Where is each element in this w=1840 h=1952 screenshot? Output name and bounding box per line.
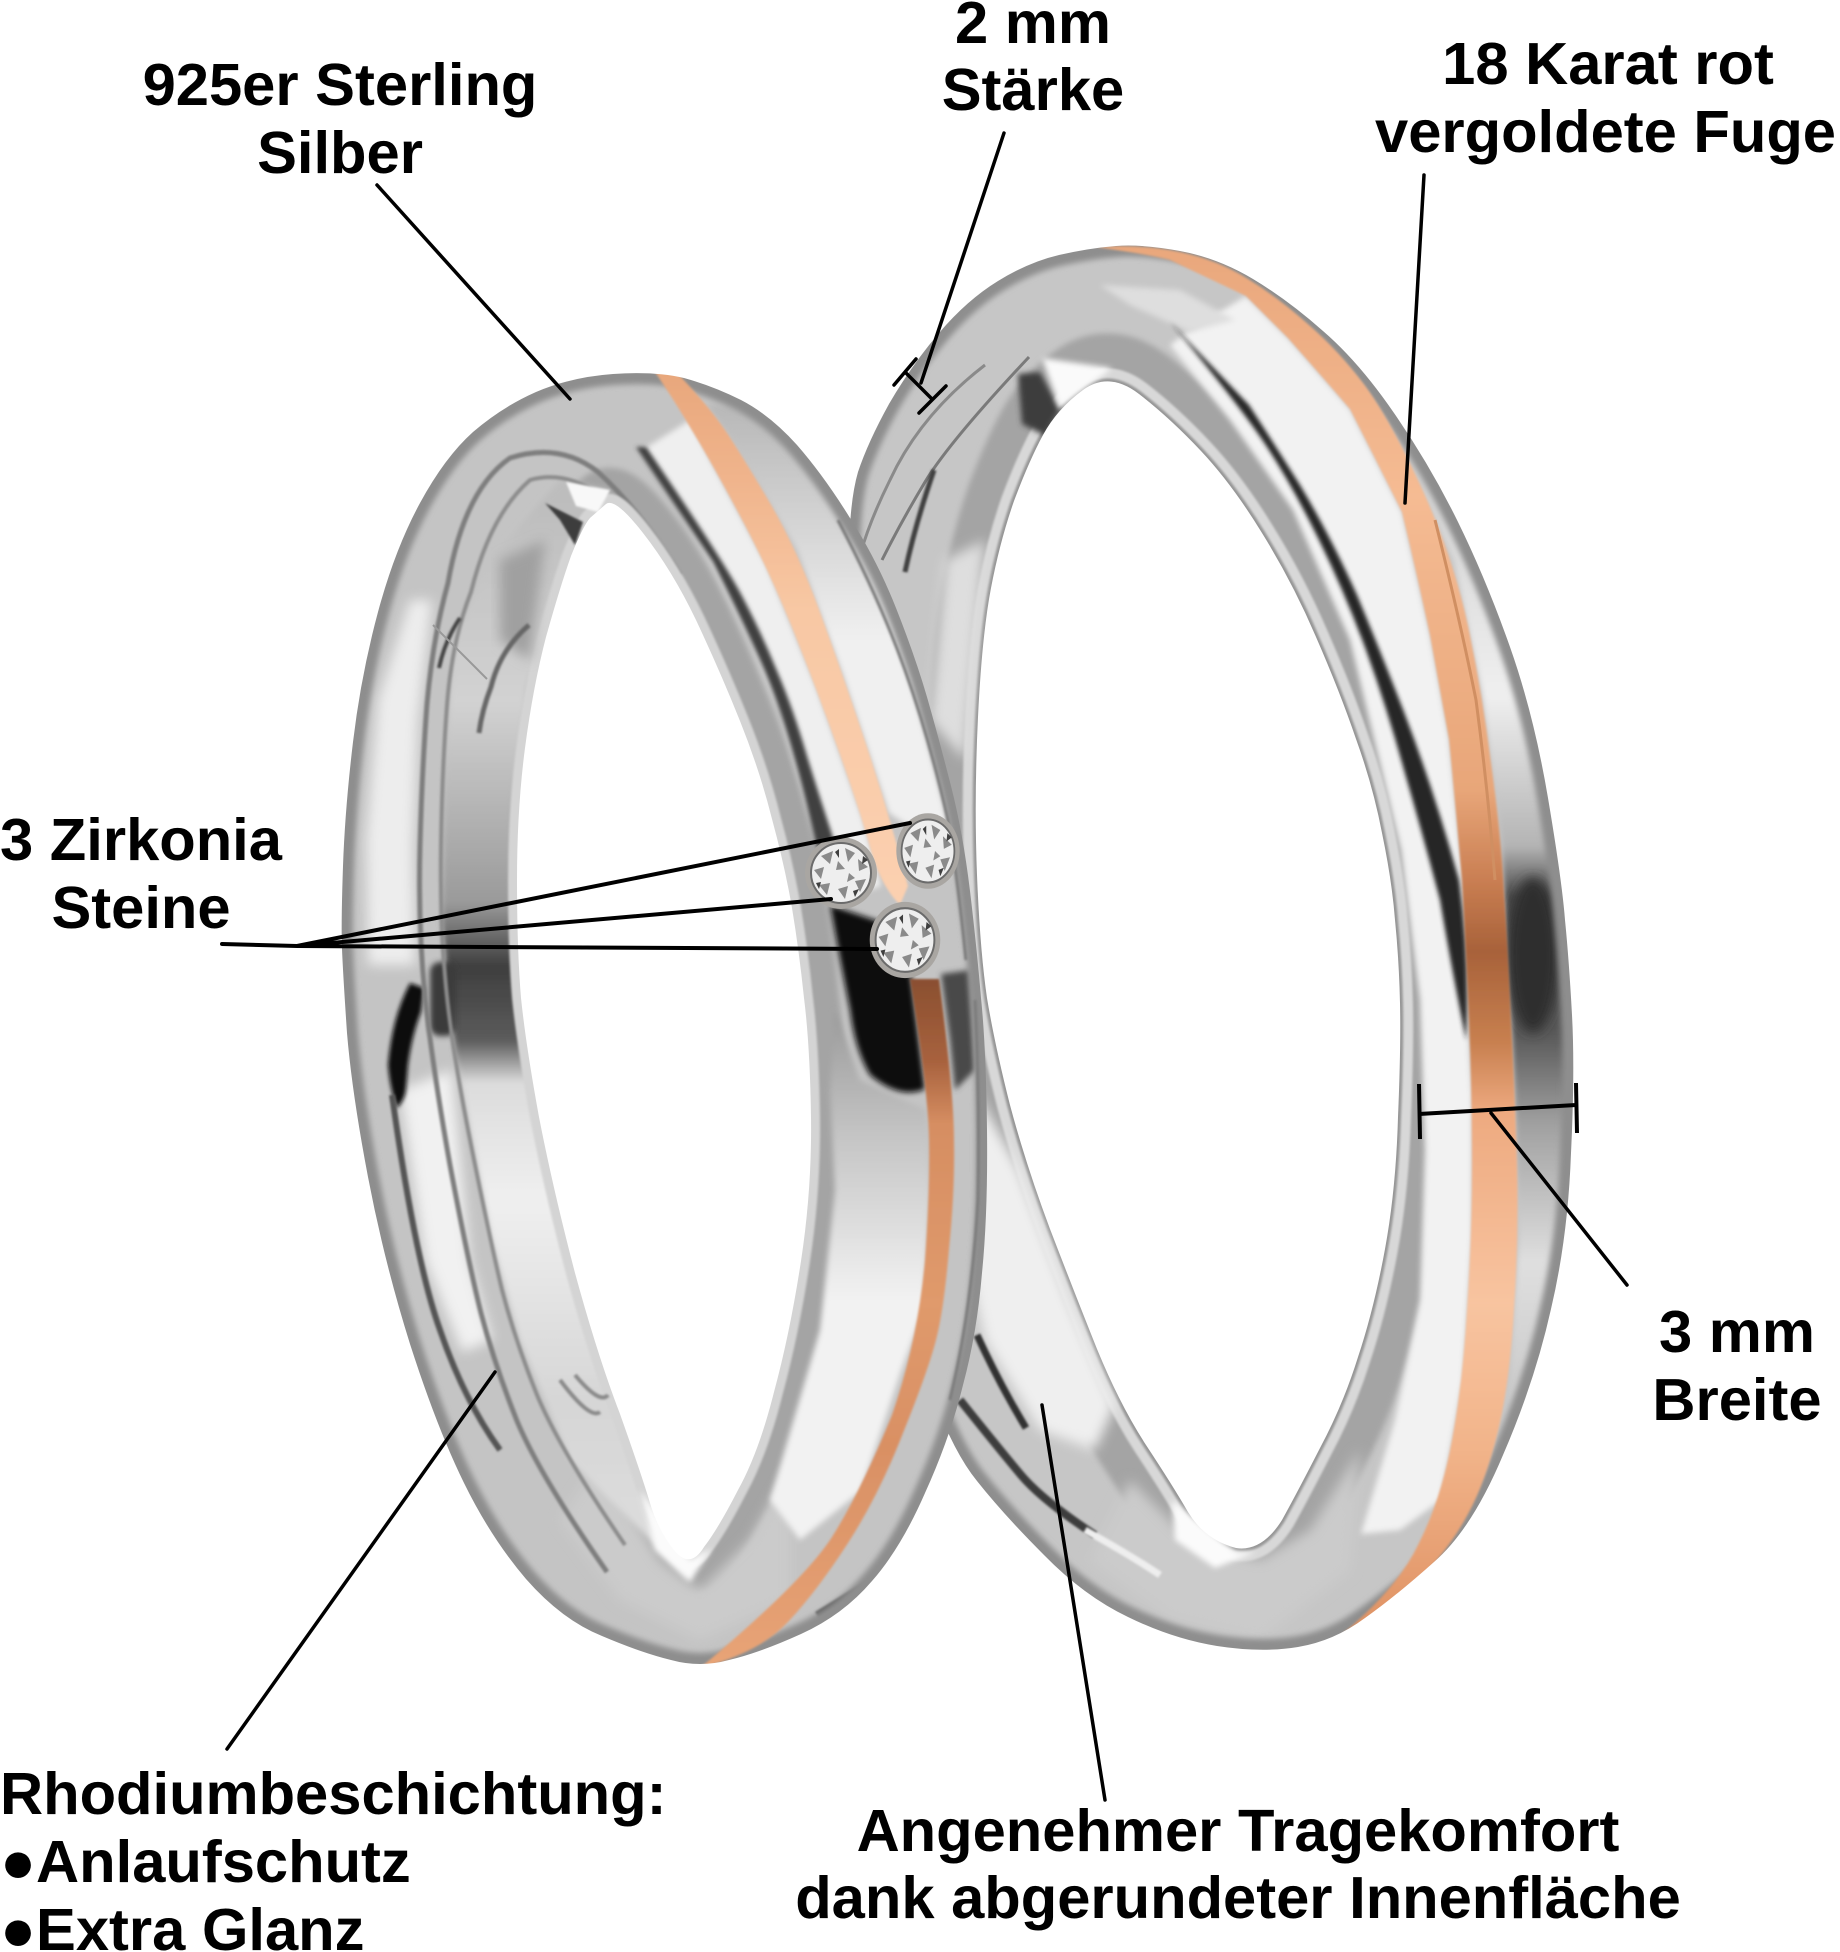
left ring: grey band around the hole: [517, 503, 811, 1559]
left ring: seam grooves: [420, 452, 680, 1572]
callout: 2 mm Staerke: [894, 0, 1124, 413]
ring: left (smaller): [330, 360, 1000, 1680]
right ring: bright face left of inlay: [1170, 296, 1472, 1534]
callout: 18 Karat rot vergoldete Fuge: vergoldete Fuge: [1375, 98, 1836, 165]
callout: 3 Zirkonia Steine: [0, 806, 910, 949]
callout: Angenehmer Tragekomfort: [795, 1405, 1681, 1931]
left ring: inner surface: [439, 486, 656, 1545]
left ring: outer rim shading: [342, 373, 987, 1664]
right ring: hole rim grooves: [976, 381, 1400, 1548]
callout: 3 mm Breite: Breite: [1652, 1366, 1822, 1433]
callout: Angenehmer Tragekomfort: dank abgerundeter Innenfläche: [795, 1864, 1681, 1931]
callout: 3 mm Breite: 3 mm: [1659, 1298, 1815, 1365]
callout: 18 Karat rot vergoldete Fuge: 18 Karat rot: [1442, 30, 1774, 97]
right ring: dark reflection band: [1170, 322, 1467, 1040]
left ring: faces beside inlay: [644, 420, 881, 900]
left ring: hole rim grooves: [517, 503, 811, 1559]
right ring: inner shadow piece: [1018, 372, 1060, 436]
left ring: rose gold inlay upper: [655, 372, 908, 905]
left ring: rose gold inlay lower: [700, 979, 954, 1668]
ring: right (larger): [840, 230, 1600, 1670]
right ring: dark blob beside inlay: [1507, 877, 1559, 1033]
callout: 925er Sterling Silber: 925er Sterling: [143, 51, 537, 118]
left ring: dark reflections lower left: [388, 983, 424, 1108]
callout: 3 mm Breite: [1419, 1083, 1822, 1433]
callout: 18 Karat rot vergoldete Fuge: [1375, 30, 1836, 503]
right ring: rose gold inlay: [1095, 246, 1518, 1641]
callout: 2 mm Staerke: Stärke: [942, 56, 1124, 123]
callout: Rhodiumbeschichtung: Rhodiumbeschichtung:: [0, 1760, 666, 1827]
callout: 925er Sterling Silber: Silber: [257, 119, 423, 186]
left ring: inner highlight and reflections: [566, 482, 610, 512]
left ring: dark reflection band: [636, 447, 852, 900]
right ring: inner surface highlights: [965, 1090, 1115, 1450]
callout: 3 Zirkonia Steine: Steine: [51, 874, 231, 941]
callout: 3 Zirkonia Steine: 3 Zirkonia: [0, 806, 283, 873]
left ring: bright outer band: [366, 600, 432, 965]
zirconia stones: [805, 813, 960, 978]
callout: Angenehmer Tragekomfort: Angenehmer Tragekomfort: [857, 1797, 1620, 1864]
right ring: lighter lower arc: [1121, 1456, 1362, 1600]
callout: Rhodiumbeschichtung: [0, 1372, 666, 1952]
callout: Rhodiumbeschichtung: ●Anlaufschutz: [0, 1828, 411, 1895]
right ring: outer rim shading: [849, 246, 1573, 1650]
callout: 925er Sterling Silber: [143, 51, 570, 399]
right ring: grey band around the hole: [976, 381, 1400, 1548]
right ring: outer face right of inlay: [1421, 482, 1566, 1370]
right ring: inlay seam line: [1435, 520, 1495, 880]
left ring: lighter lower arc: [609, 1502, 771, 1599]
left ring: right edge grooves: [838, 520, 979, 1400]
